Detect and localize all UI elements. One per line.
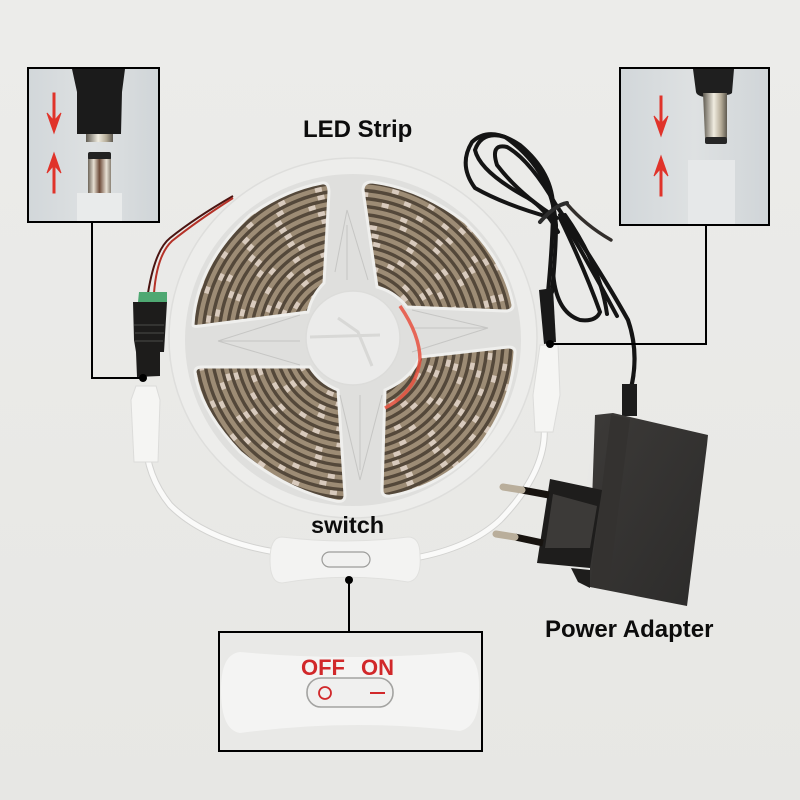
green terminal	[138, 292, 167, 302]
plug black cap	[88, 152, 111, 159]
barrel tip	[705, 137, 727, 144]
heading: LED Strip: LED Strip	[303, 116, 412, 143]
white sleeve	[688, 160, 735, 224]
heading: switch: switch	[311, 512, 384, 538]
quadrant rims	[193, 182, 515, 501]
cable tie	[540, 203, 567, 222]
up arrow	[654, 156, 668, 196]
inset panel: female connector joining plug	[28, 68, 159, 223]
white cable with inline switch	[131, 345, 560, 583]
white plug sleeve	[77, 193, 122, 223]
red and black wires	[148, 196, 233, 293]
inline switch body	[270, 537, 420, 583]
third loop	[495, 146, 557, 218]
lower pin	[496, 534, 543, 543]
on symbol	[370, 692, 385, 694]
bundled cable	[560, 215, 617, 316]
connector ribs	[134, 325, 164, 341]
LED strip reel	[169, 158, 540, 520]
bundled cable second strand	[565, 215, 607, 314]
up arrow	[47, 153, 61, 193]
cable tail	[567, 204, 611, 240]
main cable to adapter	[556, 205, 635, 392]
left white cable	[146, 440, 275, 552]
down arrow	[47, 93, 61, 133]
reel outer disc	[169, 158, 537, 518]
adapter side panel	[591, 415, 630, 590]
upper pin	[503, 487, 549, 495]
hub cross	[310, 318, 380, 366]
black socket housing	[72, 69, 125, 134]
right white cable	[415, 425, 544, 558]
second loop	[475, 135, 558, 292]
down arrow	[654, 96, 668, 136]
large rocker	[307, 678, 393, 707]
left white connector	[131, 386, 160, 462]
black barrel connector	[539, 288, 556, 344]
black power cable	[466, 134, 635, 392]
black connector body	[133, 302, 167, 377]
leader line: left inset to connector	[92, 222, 147, 382]
plug head	[537, 479, 602, 568]
plug metal barrel	[88, 159, 111, 193]
socket metal ring	[86, 134, 113, 142]
left cable shadow	[146, 440, 275, 552]
leader line: right inset to barrel connector	[546, 225, 706, 348]
metal barrel	[703, 93, 727, 138]
reel ribs	[218, 210, 488, 480]
adapter main body	[590, 413, 708, 606]
adapter rear shell	[571, 568, 590, 588]
inline switch rocker	[322, 552, 370, 567]
black plug housing	[693, 69, 734, 97]
large switch body	[221, 652, 479, 733]
OFF ON label: ON	[361, 655, 394, 680]
right white connector	[533, 345, 560, 432]
adapter rating label	[587, 422, 611, 488]
inset panel: switch detail	[219, 632, 482, 751]
power adapter	[496, 384, 708, 606]
adapter strain relief	[622, 384, 637, 416]
lower cable loop	[553, 218, 600, 320]
DC connector with green terminal	[133, 196, 233, 377]
reel frame and spokes	[185, 174, 521, 506]
red wire through hub	[385, 306, 420, 408]
OFF ON label: OFF	[301, 655, 345, 680]
reel hub	[306, 291, 400, 385]
coiled strip	[194, 184, 514, 500]
inset panel: barrel plug and sleeve	[620, 68, 769, 225]
off symbol	[319, 687, 331, 699]
heading: Power Adapter: Power Adapter	[545, 616, 713, 643]
leader line: switch to switch detail	[345, 576, 353, 632]
outer loop	[466, 134, 553, 292]
right cable shadow	[415, 425, 544, 558]
plug face	[545, 494, 597, 548]
